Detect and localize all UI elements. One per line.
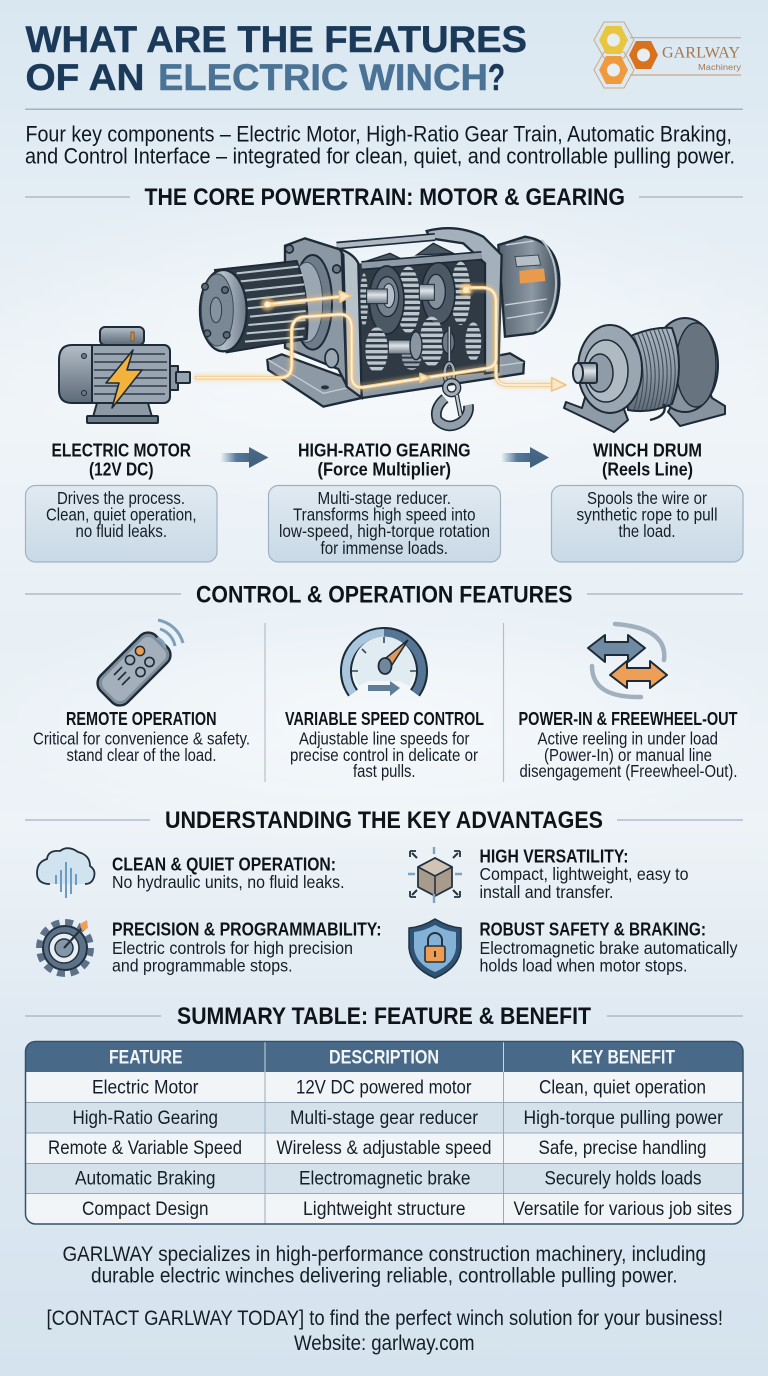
panel: motor description: no fluid leaks. [76, 521, 167, 541]
right motor housing [498, 237, 559, 337]
panel: gearing description: Transforms high speed into [293, 504, 476, 524]
text: variable speed: fast pulls. [353, 761, 416, 781]
panel: motor description: Drives the process. [57, 488, 185, 508]
text: remote operation: Critical for convenience & safety. [33, 728, 250, 748]
rods [337, 237, 435, 246]
text: precision: PRECISION & PROGRAMMABILITY: [112, 920, 382, 940]
text: robust safety [480, 920, 738, 976]
panel: motor description [26, 486, 217, 562]
text: variable speed [285, 709, 484, 781]
summary table: Remote & Variable Speed [48, 1137, 242, 1159]
icon: winch with gear train [200, 228, 559, 426]
label: high-ratio gearing: HIGH-RATIO GEARING [298, 440, 470, 460]
panel: gearing description: Multi-stage reducer. [318, 488, 451, 508]
text: remote operation: stand clear of the load. [66, 745, 216, 765]
label: winch drum [593, 440, 702, 480]
heading: summary table: SUMMARY TABLE: FEATURE & BENEFIT [177, 1003, 591, 1030]
text: remote operation: REMOTE OPERATION [66, 709, 216, 729]
summary table: DESCRIPTION [329, 1048, 439, 1068]
label: electric motor [52, 440, 191, 480]
text: variable speed: precise control in delicate or [290, 745, 478, 765]
summary table: Electric Motor [92, 1076, 199, 1098]
intro text [25, 122, 735, 168]
text: high versatility: Compact, lightweight, easy to [480, 864, 688, 884]
title: WHAT ARE THE FEATURES [26, 19, 527, 60]
text: robust safety: Electromagnetic brake automatically [480, 938, 738, 958]
title: ELECTRIC WINCH [158, 57, 488, 98]
hook [444, 327, 455, 367]
summary table [26, 1042, 743, 1224]
icon: cloud with sound wave [37, 848, 94, 898]
text: clean and quiet: No hydraulic units, no fluid leaks. [112, 872, 344, 892]
panel: drum description: synthetic rope to pull [576, 504, 718, 524]
call to action: Website: garlway.com [294, 1332, 474, 1355]
icon: gear with target [39, 920, 91, 974]
icon: shield with padlock [409, 919, 461, 978]
arrow: motor to gearing [220, 447, 268, 468]
icon: speed gauge [346, 633, 422, 696]
logo: Garlway Machinery: GARLWAY [662, 44, 740, 62]
summary table: Multi-stage gear reducer [290, 1107, 478, 1129]
text: precision: and programmable stops. [112, 956, 292, 976]
panel: gearing description: for immense loads. [320, 538, 448, 558]
panel: drum description [552, 486, 743, 562]
title [26, 19, 527, 98]
text: clean and quiet [112, 854, 344, 892]
summary table: Safe, precise handling [538, 1137, 706, 1159]
summary table: Versatile for various job sites [514, 1198, 732, 1220]
text: high versatility: HIGH VERSATILITY: [480, 846, 628, 866]
label: winch drum: WINCH DRUM [593, 440, 702, 460]
summary table: Securely holds loads [544, 1168, 702, 1190]
call to action [46, 1307, 723, 1355]
icon: remote control [93, 620, 183, 710]
panel: gearing description: low-speed, high-torque rotation [279, 521, 490, 541]
flange [293, 255, 332, 350]
text: clean and quiet: CLEAN & QUIET OPERATION: [112, 854, 336, 874]
rear frame [427, 228, 502, 373]
gears [360, 274, 368, 324]
logo: Garlway Machinery [594, 22, 741, 88]
heading: control features: CONTROL & OPERATION FEATURES [196, 582, 572, 608]
label: high-ratio gearing [298, 440, 470, 480]
front frame plate [285, 238, 347, 386]
label: high-ratio gearing: (Force Multiplier) [318, 460, 451, 480]
panel: drum description: Spools the wire or [587, 488, 707, 508]
text: remote operation [33, 709, 250, 765]
text: precision [112, 920, 382, 976]
closing statement [62, 1243, 706, 1288]
text: power-in and freewheel-out: (Power-In) or manual line [544, 745, 712, 765]
panel: drum description: the load. [618, 521, 676, 541]
title: OF AN [26, 57, 144, 98]
heading: core powertrain: THE CORE POWERTRAIN: MOTOR & GEARING [144, 184, 625, 211]
text: variable speed: VARIABLE SPEED CONTROL [285, 709, 484, 729]
summary table: 12V DC powered motor [296, 1076, 472, 1098]
summary table: High-torque pulling power [524, 1107, 723, 1129]
text: high versatility: install and transfer. [480, 882, 614, 902]
icon: electric motor [59, 327, 190, 423]
summary table: Lightweight structure [303, 1198, 466, 1220]
text: robust safety: ROBUST SAFETY & BRAKING: [480, 920, 706, 940]
closing statement: durable electric winches delivering reliable, controllable pulling power. [91, 1264, 678, 1288]
text: robust safety: holds load when motor stops. [480, 956, 688, 976]
summary table: Clean, quiet operation [539, 1076, 706, 1098]
text: power-in and freewheel-out [518, 709, 738, 781]
heading: key advantages: UNDERSTANDING THE KEY ADVANTAGES [165, 807, 603, 834]
text: power-in and freewheel-out: Active reeling in under load [538, 728, 718, 748]
label: electric motor: ELECTRIC MOTOR [52, 440, 191, 460]
text: precision: Electric controls for high precision [112, 938, 353, 958]
label: winch drum: (Reels Line) [602, 460, 693, 480]
label: electric motor: (12V DC) [89, 460, 154, 480]
summary table: FEATURE [109, 1048, 182, 1068]
icon: box with arrows [408, 847, 462, 903]
base plate [267, 353, 524, 407]
summary table: Automatic Braking [75, 1168, 216, 1190]
panel: gearing description [268, 486, 500, 562]
gear chamber [358, 254, 487, 385]
power-flow glow lines [197, 283, 566, 391]
summary table: Electromagnetic brake [299, 1168, 470, 1190]
title: ? [488, 57, 505, 98]
arrow: gearing to drum [501, 447, 549, 468]
summary table: KEY BENEFIT [571, 1048, 675, 1068]
text: high versatility [480, 846, 688, 902]
panel: motor description: Clean, quiet operation, [46, 504, 196, 524]
icon: winch drum [564, 318, 725, 432]
text: variable speed: Adjustable line speeds for [299, 728, 470, 748]
summary table: Compact Design [82, 1198, 208, 1220]
left motor [215, 261, 308, 352]
logo: Garlway Machinery: Machinery [698, 63, 741, 72]
summary table: Wireless & adjustable speed [276, 1137, 492, 1159]
closing statement: GARLWAY specializes in high-performance construction machinery, including [62, 1243, 706, 1266]
summary table: High-Ratio Gearing [72, 1107, 218, 1129]
icon: power-in and freewheel arrows [588, 624, 667, 697]
